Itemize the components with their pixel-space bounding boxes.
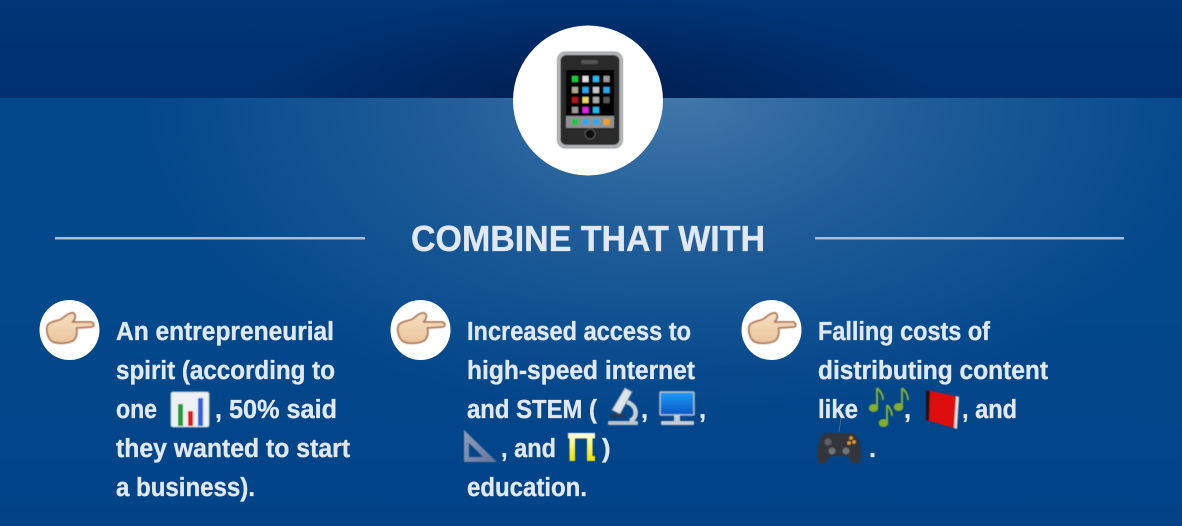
text: entrepreneurial spirit: they wanted to start (116, 435, 350, 463)
text: entrepreneurial spirit (116, 318, 350, 502)
text: distribution costs: . (869, 435, 876, 463)
text: internet and STEM: Increased access to (467, 318, 691, 346)
icon: pointing hand (390, 300, 450, 360)
icon: musical notes (870, 388, 908, 426)
text: distribution costs: Falling costs of (818, 318, 990, 346)
text: internet and STEM: , and (501, 435, 556, 463)
icon: triangle ruler (464, 430, 497, 462)
text: internet and STEM: , (699, 396, 706, 424)
panel: entrepreneurial spirit (40, 300, 350, 502)
icon: bar chart (171, 392, 209, 427)
panel: internet and STEM (390, 300, 706, 502)
text: internet and STEM: ) (602, 435, 610, 463)
text: internet and STEM: education. (467, 474, 587, 502)
text: distribution costs: like (818, 396, 858, 424)
icon: pointing hand (742, 300, 802, 360)
text: entrepreneurial spirit: An entrepreneurial (116, 318, 334, 346)
icon: smartphone in white circle (513, 26, 663, 176)
text: internet and STEM: high-speed internet (467, 357, 695, 385)
text: distribution costs (818, 318, 1048, 463)
text: entrepreneurial spirit: a business). (116, 474, 255, 502)
icon: microscope (608, 388, 638, 425)
text: internet and STEM: and STEM ( (467, 396, 597, 424)
icon: pi symbol (568, 433, 595, 461)
icon: desktop computer (660, 392, 694, 425)
text: entrepreneurial spirit: , 50% said (215, 396, 337, 424)
icon: game controller (817, 418, 861, 464)
text: entrepreneurial spirit: spirit (according to (116, 357, 335, 385)
text: entrepreneurial spirit: one (116, 396, 157, 424)
text: distribution costs: distributing content (818, 357, 1048, 385)
text: internet and STEM: , (641, 396, 648, 424)
panel: distribution costs (742, 300, 1048, 464)
icon: pointing hand (40, 300, 100, 360)
text: distribution costs: , (904, 396, 911, 424)
text: distribution costs: , and (962, 396, 1017, 424)
icon: red book (926, 390, 959, 429)
heading: COMBINE THAT WITH (411, 218, 765, 259)
text: internet and STEM (467, 318, 706, 502)
